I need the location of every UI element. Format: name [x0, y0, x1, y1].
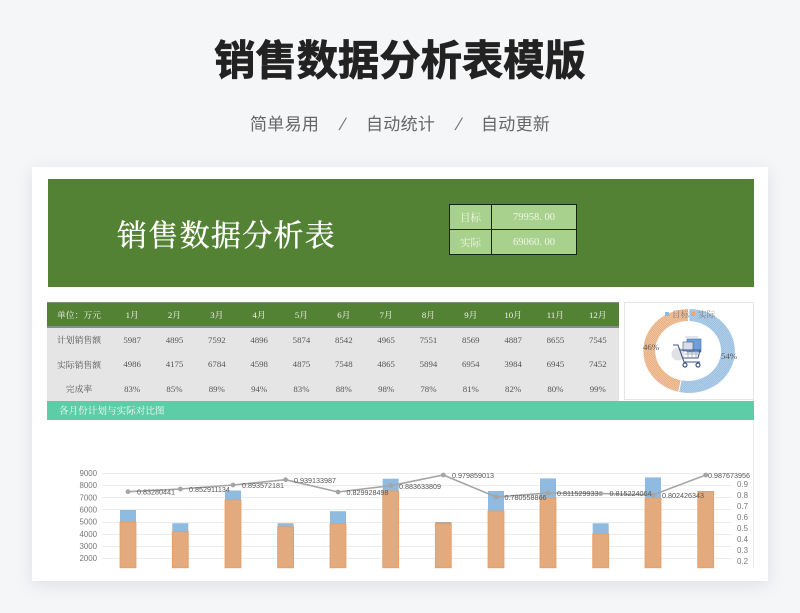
- line data labels: 0.83280441: [137, 488, 175, 496]
- subtitle: [250, 115, 550, 134]
- target and actual summary table: [449, 204, 577, 255]
- monthly sales data table: 7551: [420, 335, 437, 345]
- monthly sales data table: 计划销售额: [57, 335, 101, 345]
- monthly sales data table: 10月: [504, 310, 522, 320]
- panel: green banner: [48, 179, 754, 287]
- legend: 目标: [672, 308, 690, 320]
- monthly sales data table: 83%: [293, 384, 310, 394]
- monthly sales data table: 78%: [420, 384, 437, 394]
- monthly sales data table: 4月: [253, 310, 266, 320]
- monthly sales data table: 94%: [251, 384, 267, 394]
- monthly sales data table: 88%: [336, 384, 352, 394]
- subtitle: /: [453, 115, 464, 134]
- monthly sales data table: 5874: [293, 335, 310, 345]
- combo chart: monthly plan vs actual: [79, 420, 754, 568]
- monthly sales data table: 8569: [462, 335, 480, 345]
- panel: spreadsheet card: [32, 167, 768, 581]
- monthly sales data table: 5月: [295, 310, 308, 320]
- monthly sales data table: 3月: [210, 310, 223, 320]
- right axis labels: 0.4: [737, 535, 749, 544]
- right axis labels: 0.6: [737, 513, 749, 522]
- line data labels: [137, 471, 750, 502]
- left axis labels: 5000: [79, 518, 98, 526]
- monthly sales data table: 8542: [335, 335, 353, 345]
- left axis labels: 4000: [79, 530, 98, 539]
- line data labels: 0.852911134: [189, 485, 230, 494]
- right axis labels: 0.7: [737, 502, 748, 511]
- subtitle: /: [337, 115, 348, 134]
- title: 销售数据分析表模版: [214, 38, 586, 84]
- monthly sales data table: 82%: [505, 384, 521, 394]
- line data labels: 0.979859013: [452, 471, 494, 480]
- monthly sales data table: 7452: [589, 359, 607, 369]
- monthly sales data table: 6784: [208, 359, 226, 369]
- left axis labels: [79, 469, 98, 563]
- monthly sales data table: 5894: [420, 359, 437, 369]
- line data labels: 0.815224064: [610, 489, 651, 498]
- monthly sales data table: 单位：万元: [57, 310, 101, 320]
- monthly sales data table: 4598: [250, 359, 268, 369]
- left axis labels: 2000: [79, 554, 98, 563]
- monthly sales data table: 4875: [293, 359, 310, 369]
- monthly sales data table: 1月: [126, 310, 139, 320]
- completion rate line: [126, 473, 708, 499]
- line data labels: 0.883633809: [399, 482, 441, 491]
- subtitle: 自动更新: [481, 115, 550, 134]
- monthly sales data table: 8655: [547, 335, 564, 345]
- legend: [665, 308, 716, 320]
- monthly sales data table: 4986: [123, 359, 141, 369]
- line data labels: 0.893572181: [242, 481, 284, 490]
- monthly sales data table: 2月: [168, 310, 181, 320]
- panel: donut chart: [624, 302, 754, 400]
- line data labels: 0.811529933: [557, 489, 598, 498]
- subtitle: 自动统计: [366, 115, 435, 134]
- right axis labels: 0.9: [737, 480, 749, 489]
- left axis labels: 6000: [79, 506, 98, 514]
- right axis labels: 0.5: [737, 524, 749, 533]
- monthly sales data table: 4896: [250, 335, 268, 345]
- monthly sales data table: 81%: [463, 384, 479, 394]
- right axis labels: 0.3: [737, 546, 749, 555]
- monthly sales data table: 完成率: [66, 384, 92, 394]
- monthly sales data table: 6945: [547, 359, 564, 369]
- subtitle: 简单易用: [250, 115, 319, 134]
- monthly sales data table: [47, 302, 619, 402]
- monthly sales data table: 4895: [166, 335, 183, 345]
- monthly sales data table: 6月: [337, 310, 350, 320]
- monthly sales data table: 12月: [589, 310, 607, 320]
- chart heading bar: 各月份计划与实际对比图: [59, 406, 165, 417]
- monthly sales data table: 6954: [462, 359, 480, 369]
- monthly sales data table: 4887: [504, 335, 522, 345]
- donut value labels: 46%: [643, 342, 660, 352]
- monthly sales data table: 98%: [378, 384, 394, 394]
- monthly sales data table: 7592: [208, 335, 226, 345]
- monthly sales data table: 85%: [166, 384, 183, 394]
- line data labels: 0.829928498: [346, 488, 388, 497]
- monthly sales data table: 80%: [547, 384, 564, 394]
- monthly sales data table: 4865: [377, 359, 395, 369]
- legend: 实际: [698, 308, 716, 320]
- left axis labels: 7000: [79, 494, 98, 502]
- target and actual summary table: 目标: [460, 212, 481, 224]
- target and actual summary table: 实际: [460, 238, 481, 248]
- monthly sales data table: 83%: [124, 384, 140, 394]
- monthly sales data table: 99%: [590, 384, 606, 394]
- monthly sales data table: 7545: [589, 335, 607, 345]
- monthly sales data table: 实际销售额: [57, 360, 101, 370]
- left axis labels: 3000: [79, 542, 98, 551]
- monthly sales data table: 89%: [209, 384, 225, 394]
- right axis labels: 0.8: [737, 491, 749, 500]
- line data labels: 0.987673956: [708, 471, 750, 480]
- right axis labels: [737, 480, 749, 566]
- target and actual summary table: 79958. 00: [513, 212, 555, 222]
- left axis labels: 8000: [79, 481, 98, 490]
- monthly sales data table: 4175: [166, 359, 183, 369]
- banner heading: 销售数据分析表: [117, 220, 336, 253]
- right axis labels: 0.2: [737, 557, 748, 566]
- donut segment: target 54%: [679, 309, 735, 393]
- left axis labels: 9000: [79, 469, 98, 478]
- line data labels: 0.802426343: [662, 491, 704, 500]
- monthly sales data table: 7月: [380, 310, 393, 320]
- planned sales bars: [120, 477, 714, 535]
- monthly sales data table: 8月: [422, 310, 435, 320]
- actual sales bars: [120, 491, 714, 568]
- icon: shopping cart: [672, 337, 701, 367]
- target and actual summary table: 69060. 00: [513, 236, 555, 248]
- donut value labels: [643, 342, 738, 361]
- monthly sales data table: 11月: [547, 310, 564, 320]
- grid lines: [102, 474, 732, 558]
- monthly sales data table: 7548: [335, 359, 353, 369]
- chart heading bar: [47, 401, 754, 420]
- monthly sales data table: 4965: [377, 335, 395, 345]
- line data labels: 0.780558866: [504, 493, 546, 502]
- donut value labels: 54%: [721, 351, 738, 361]
- donut segment: actual 46%: [643, 309, 688, 392]
- monthly sales data table: 5987: [123, 335, 141, 345]
- monthly sales data table: 3984: [504, 359, 522, 369]
- monthly sales data table: 9月: [464, 310, 477, 320]
- line data labels: 0.939133987: [294, 476, 336, 485]
